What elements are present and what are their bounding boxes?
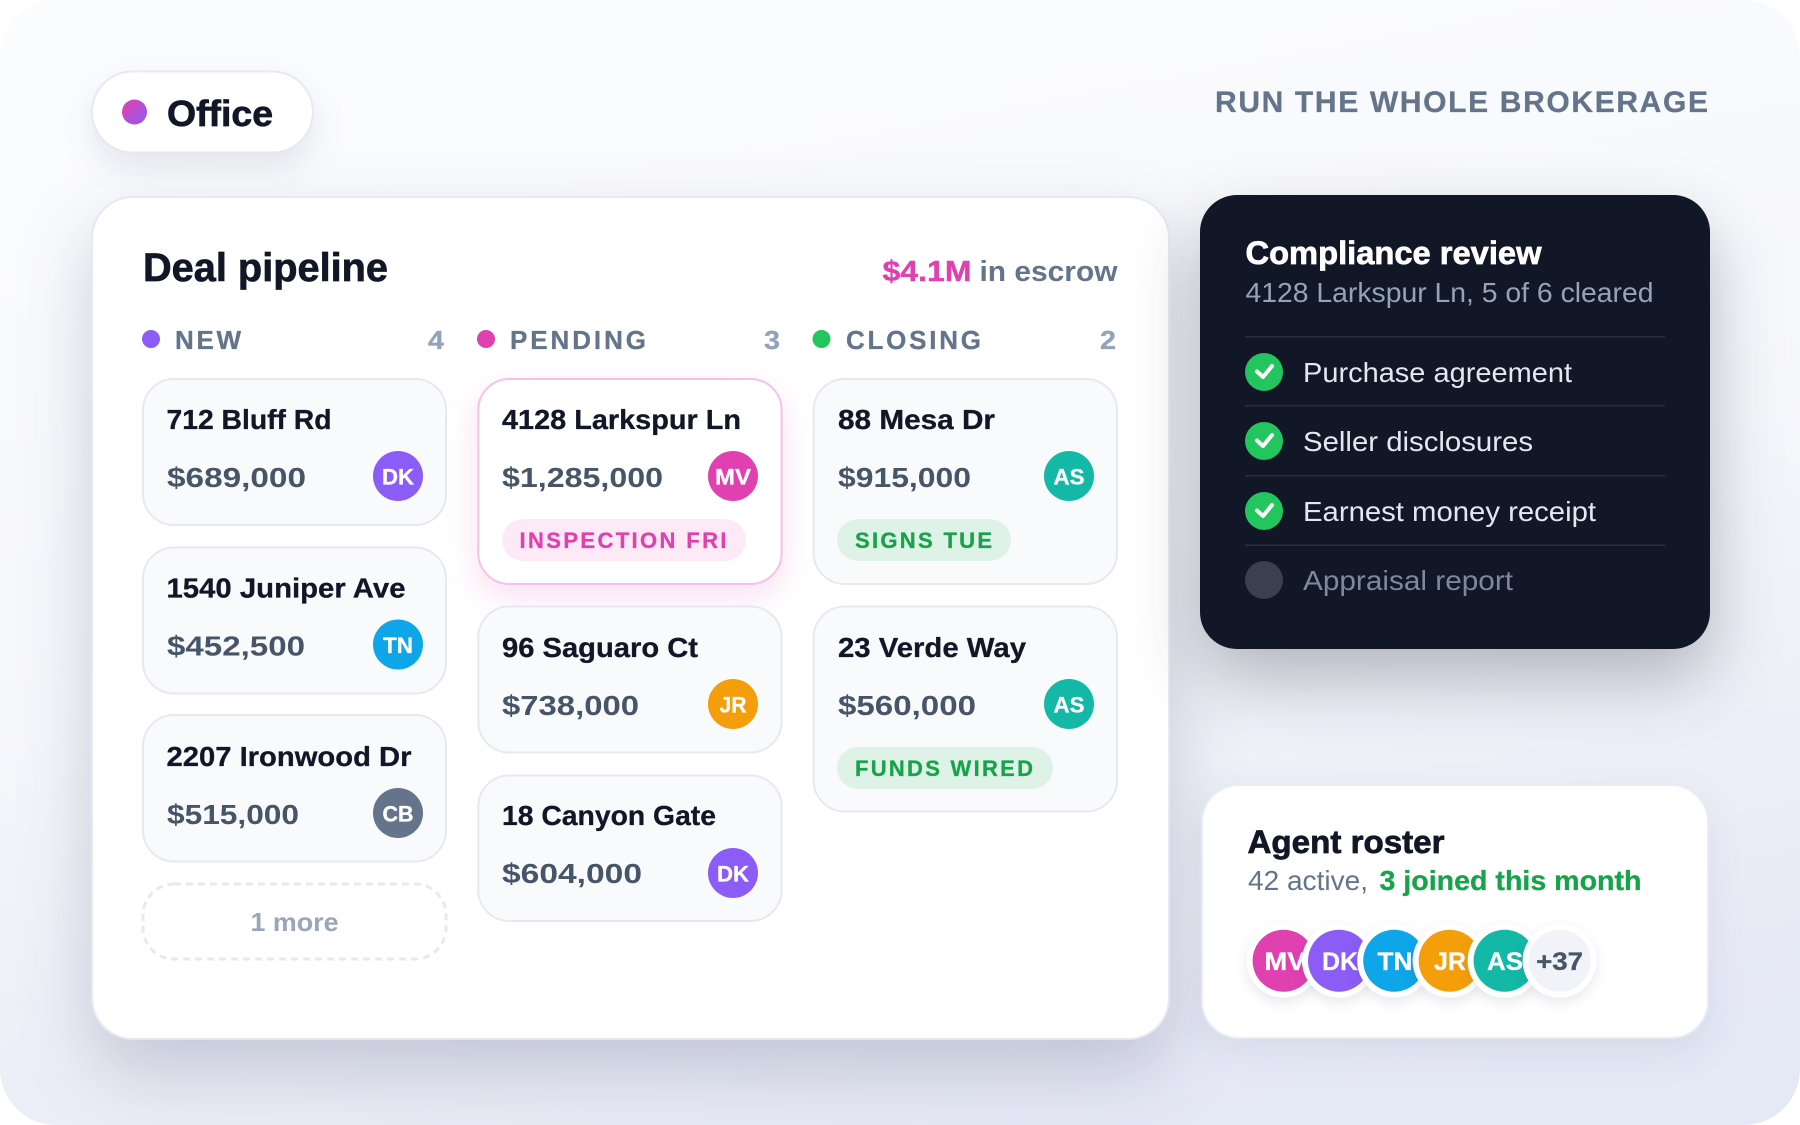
column header: closing: CLOSING [846, 325, 981, 355]
avatar stack: +37 [1536, 948, 1583, 976]
checklist item: seller disclosures: Seller disclosures [1303, 426, 1533, 457]
tag: inspection friday [502, 519, 746, 561]
deal card: 88 Mesa Dr: AS [1054, 464, 1084, 490]
deal card: 1540 Juniper Ave: $452,500 [167, 630, 305, 662]
avatar stack: MV [1264, 948, 1306, 976]
deal card: 18 Canyon Gate: $604,000 [502, 858, 642, 889]
tag: funds wired [837, 747, 1053, 789]
avatar stack: AS [1487, 948, 1523, 976]
escrow total [882, 256, 1118, 288]
avatar stack: DK [1322, 948, 1358, 976]
column header: new: NEW [175, 325, 241, 355]
deal card: 18 Canyon Gate: DK [717, 862, 749, 886]
checklist item: appraisal report (pending) [1245, 561, 1513, 599]
avatar stack [1247, 924, 1597, 998]
deal card: 4128 Larkspur Ln (highlighted) [478, 379, 782, 584]
deal card: 4128 Larkspur Ln (highlighted): 4128 Larkspur Ln [502, 404, 741, 435]
deal card: 96 Saguaro Ct: 96 Saguaro Ct [502, 632, 698, 663]
deal card: 23 Verde Way: 23 Verde Way [838, 632, 1026, 663]
deal card: 96 Saguaro Ct: JR [720, 692, 747, 718]
deal card: 18 Canyon Gate [478, 776, 782, 921]
tag: signs tuesday [837, 519, 1011, 561]
deal card: 2207 Ironwood Dr: 2207 Ironwood Dr [166, 741, 412, 772]
deal card: 2207 Ironwood Dr: CB [382, 802, 414, 826]
escrow total: in escrow [980, 256, 1118, 288]
compliance title: Compliance review [1246, 235, 1542, 271]
more deals placeholder [143, 884, 446, 959]
panel: agent roster [1202, 785, 1708, 1038]
panel: deal pipeline [92, 197, 1169, 1039]
deal card: 88 Mesa Dr [814, 379, 1117, 584]
deal card: 88 Mesa Dr: $915,000 [838, 462, 971, 493]
checklist item: earnest money receipt [1245, 492, 1596, 530]
deal card: 1540 Juniper Ave [143, 548, 446, 694]
deal card: 4128 Larkspur Ln (highlighted): MV [715, 464, 751, 490]
column header: pending [477, 325, 780, 355]
roster title: Agent roster [1248, 824, 1444, 860]
checklist item: purchase agreement: Purchase agreement [1303, 357, 1572, 388]
deal card: 23 Verde Way: AS [1054, 692, 1084, 718]
icon: office gradient dot [122, 100, 147, 124]
deal card: 96 Saguaro Ct: $738,000 [502, 690, 639, 721]
deal card: 96 Saguaro Ct [478, 606, 782, 752]
column header: closing [812, 325, 1116, 355]
deal card: 88 Mesa Dr: 88 Mesa Dr [838, 404, 995, 435]
office pill badge [92, 72, 313, 152]
avatar stack: TN [1378, 948, 1412, 976]
deal card: 712 Bluff Rd: DK [382, 464, 414, 490]
more deals placeholder: 1 more [250, 907, 338, 937]
tag: inspection friday: INSPECTION FRI [520, 528, 726, 553]
deal card: 23 Verde Way: $560,000 [838, 690, 976, 721]
deal card: 712 Bluff Rd: $689,000 [167, 462, 306, 493]
escrow total: $4.1M [882, 256, 972, 288]
tagline heading: RUN THE WHOLE BROKERAGE [1215, 86, 1708, 119]
checklist item: seller disclosures [1245, 422, 1533, 460]
deal card: 1540 Juniper Ave: 1540 Juniper Ave [166, 572, 406, 604]
column header: new [142, 325, 445, 355]
checklist item: appraisal report (pending): Appraisal report [1303, 565, 1513, 596]
roster subtitle: 42 active, [1248, 865, 1368, 896]
compliance subtitle: 4128 Larkspur Ln, 5 of 6 cleared [1246, 277, 1654, 308]
deal card: 1540 Juniper Ave: TN [383, 633, 413, 658]
deal card: 712 Bluff Rd [143, 379, 446, 525]
tag: funds wired: FUNDS WIRED [855, 756, 1033, 781]
office label: Office [167, 93, 273, 134]
column header: pending: PENDING [510, 325, 646, 355]
avatar stack: JR [1434, 948, 1466, 976]
deal card: 23 Verde Way [814, 606, 1117, 812]
roster subtitle [1248, 865, 1642, 896]
roster subtitle: 3 joined this month [1380, 865, 1642, 896]
deal card: 4128 Larkspur Ln (highlighted): $1,285,000 [502, 462, 663, 493]
deal card: 712 Bluff Rd: 712 Bluff Rd [166, 404, 332, 435]
panel: compliance review [1200, 195, 1710, 649]
checklist item: earnest money receipt: Earnest money receipt [1303, 496, 1596, 527]
column header: closing: 2 [1100, 325, 1116, 355]
deal card: 2207 Ironwood Dr [143, 715, 446, 862]
deal card: 2207 Ironwood Dr: $515,000 [167, 799, 299, 830]
deal card: 18 Canyon Gate: 18 Canyon Gate [502, 800, 716, 831]
column header: pending: 3 [764, 325, 780, 355]
column header: new: 4 [428, 325, 445, 355]
checklist item: purchase agreement [1245, 353, 1572, 391]
pipeline title: Deal pipeline [143, 246, 388, 290]
tag: signs tuesday: SIGNS TUE [855, 528, 992, 553]
